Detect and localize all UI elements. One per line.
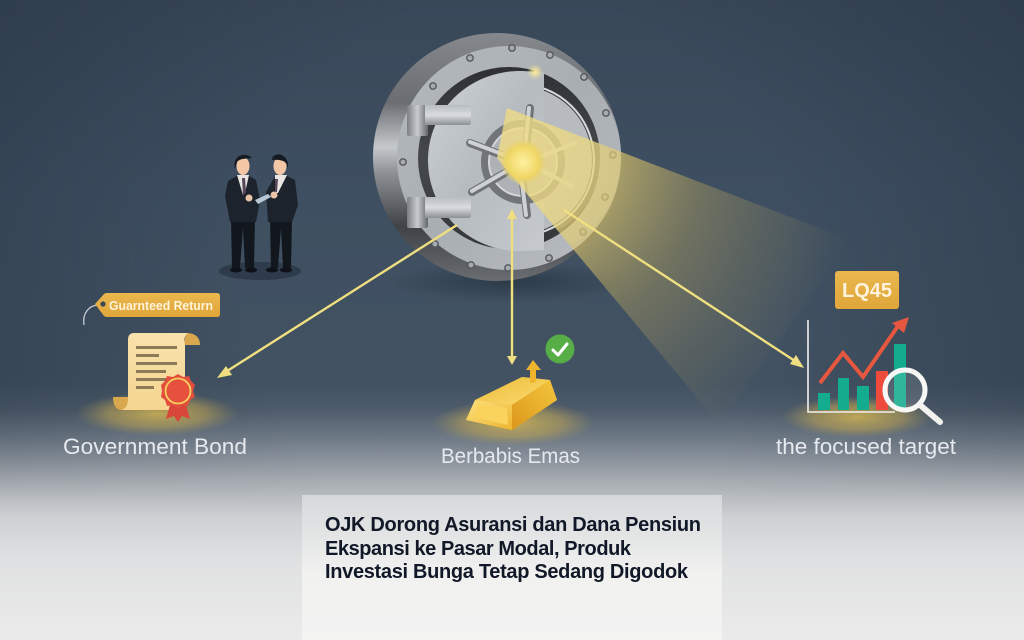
panel: headline — [302, 495, 722, 640]
tag: guaranteed return — [84, 293, 220, 325]
icon: up arrow — [526, 360, 541, 383]
icon: green check — [546, 334, 574, 364]
icon: magnifier — [885, 370, 940, 422]
arrow: vault to government bond — [217, 225, 457, 378]
icon: red seal ribbon — [161, 374, 195, 422]
label: the focused target: the focused target — [776, 434, 956, 459]
badge: lq45: LQ45 — [842, 280, 892, 302]
gold bar group — [431, 334, 595, 468]
arrow: vault to focused target — [564, 210, 804, 368]
tag: guaranteed return: Guarnteed Return — [109, 299, 213, 313]
chart: bars and trend arrow — [808, 317, 909, 412]
light beam — [497, 65, 820, 400]
icon: bank vault door — [373, 33, 621, 281]
label: government bond: Government Bond — [63, 434, 247, 459]
label: berbabis emas: Berbabis Emas — [441, 445, 580, 468]
vault wheel — [470, 108, 575, 215]
government bond group — [63, 293, 247, 459]
headline text: Investasi Bunga Tetap Sedang Digodok — [325, 561, 689, 583]
handed document — [255, 194, 271, 204]
badge: lq45 — [835, 271, 899, 309]
headline text: Ekspansi ke Pasar Modal, Produk — [325, 538, 632, 560]
vault rivets — [400, 45, 616, 271]
vault door panel — [428, 71, 544, 251]
icon: scroll document — [113, 333, 200, 410]
headline text: OJK Dorong Asuransi dan Dana Pensiun — [325, 514, 701, 536]
left businessman — [225, 155, 260, 272]
focused target group — [776, 271, 956, 459]
icon: gold bar — [466, 377, 557, 430]
icon: two businessmen — [219, 154, 301, 280]
vault hinges — [407, 105, 471, 228]
right businessman — [266, 154, 298, 272]
arrow: vault to gold — [507, 209, 517, 365]
